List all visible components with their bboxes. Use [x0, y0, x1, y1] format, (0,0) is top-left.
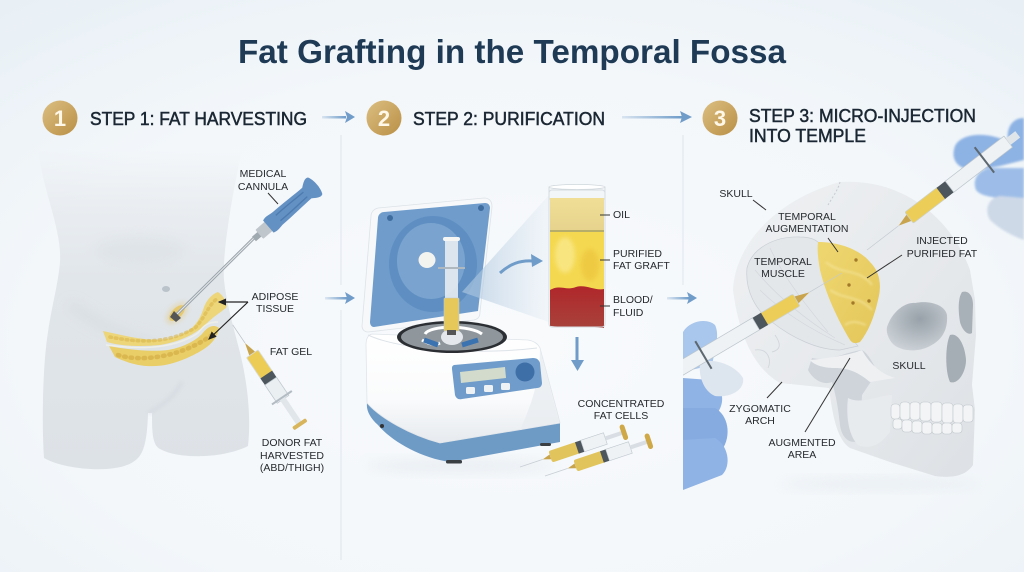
label: augmented area — [768, 358, 850, 461]
zygomatic arch and jaw gap — [808, 350, 880, 442]
temporal muscle — [747, 237, 858, 350]
step 2 heading: 2 — [378, 106, 390, 131]
label: temporal augmentation: TEMPORAL — [778, 211, 836, 223]
label: blood/fluid — [600, 294, 653, 319]
torso illustration — [38, 150, 249, 469]
label: medical cannula: MEDICAL — [240, 168, 286, 180]
label: purified fat graft: PURIFIED — [613, 248, 662, 260]
arrow: step 2 to 3 — [622, 111, 692, 123]
label: adipose tissue — [209, 291, 298, 339]
label: purified fat graft — [600, 248, 670, 272]
label: temporal muscle: MUSCLE — [761, 268, 805, 280]
panel: purification — [362, 184, 670, 484]
label: temporal muscle: TEMPORAL — [754, 256, 812, 268]
label: skull lower: SKULL — [892, 360, 926, 372]
label: concentrated fat cells: CONCENTRATED — [578, 398, 665, 410]
label: donor fat harvested: DONOR FAT — [262, 437, 323, 449]
zoom cone — [462, 195, 549, 322]
title: Fat Grafting in the Temporal Fossa — [238, 33, 787, 70]
label: zygomatic arch: ARCH — [745, 415, 775, 427]
label: concentrated fat cells — [578, 398, 665, 422]
label: augmented area: AUGMENTED — [768, 437, 836, 449]
label: medical cannula — [238, 168, 288, 204]
lid — [362, 198, 492, 332]
label: skull upper — [719, 188, 766, 210]
blue base — [367, 403, 560, 462]
panel: micro-injection — [669, 118, 1024, 490]
white housing — [366, 334, 560, 443]
arrow: step 1 to 2 — [322, 111, 355, 123]
panel: fat harvesting — [38, 150, 324, 474]
eye sockets and nose — [887, 302, 947, 350]
arrow: curved to beaker — [500, 254, 543, 273]
step 3 heading: STEP 3: MICRO-INJECTION — [749, 106, 976, 126]
control panel — [452, 358, 542, 399]
label: donor fat harvested — [260, 437, 324, 474]
fat layers — [103, 292, 227, 366]
syringe in rotor — [445, 241, 458, 298]
label: donor fat harvested: HARVESTED — [260, 450, 324, 462]
label: oil: OIL — [613, 209, 630, 221]
beaker of separated layers — [549, 184, 605, 328]
label: oil — [600, 209, 630, 221]
label: adipose tissue: ADIPOSE — [252, 291, 298, 303]
label: skull upper: SKULL — [719, 188, 753, 200]
arrow: down to syringes — [571, 337, 584, 371]
label: injected purified fat: PURIFIED FAT — [907, 248, 978, 260]
label: concentrated fat cells: FAT CELLS — [594, 410, 648, 422]
rotor — [397, 321, 507, 353]
label: temporal muscle — [754, 256, 812, 280]
label: medical cannula: CANNULA — [238, 181, 288, 193]
label: injected purified fat: INJECTED — [916, 235, 968, 247]
label: adipose tissue: TISSUE — [256, 303, 294, 315]
label: blood/fluid: FLUID — [613, 307, 644, 319]
icon: medical cannula — [170, 176, 324, 322]
label: temporal augmentation — [765, 211, 849, 252]
label: fat gel: FAT GEL — [270, 346, 312, 358]
teeth — [891, 402, 973, 434]
label: temporal augmentation: AUGMENTATION — [765, 223, 849, 235]
skull illustration — [733, 182, 980, 490]
icon: concentrated fat syringe 1 — [517, 424, 629, 475]
icon: concentrated fat syringe 2 — [542, 433, 654, 484]
step 1 heading: STEP 1: FAT HARVESTING — [90, 109, 307, 129]
label: purified fat graft: FAT GRAFT — [613, 260, 670, 272]
label: zygomatic arch — [729, 382, 791, 427]
icon: centrifuge — [362, 198, 560, 473]
step 2 heading: STEP 2: PURIFICATION — [413, 109, 605, 129]
icon: syringe top right — [857, 122, 1024, 263]
step 1 heading: 1 — [54, 106, 66, 131]
icon: gloved hand lower left — [683, 321, 743, 490]
step 1 heading — [42, 100, 307, 136]
fat augmentation — [818, 242, 880, 343]
step 3 heading: 3 — [714, 106, 726, 131]
icon: fat gel syringe — [223, 318, 311, 433]
label: injected purified fat — [867, 235, 978, 278]
icon: syringe lower left — [683, 272, 842, 376]
step 3 heading: INTO TEMPLE — [749, 126, 866, 146]
icon: gloved hand top right — [954, 118, 1024, 240]
arrow: panel 1 to panel 2 — [325, 292, 355, 304]
step 3 heading — [702, 100, 976, 146]
label: blood/fluid: BLOOD/ — [613, 294, 653, 306]
step 2 heading — [366, 100, 605, 136]
label: donor fat harvested: (ABD/THIGH) — [260, 462, 324, 474]
label: zygomatic arch: ZYGOMATIC — [729, 403, 791, 415]
label: augmented area: AREA — [788, 449, 816, 461]
arrow: panel 2 to panel 3 — [667, 292, 697, 304]
